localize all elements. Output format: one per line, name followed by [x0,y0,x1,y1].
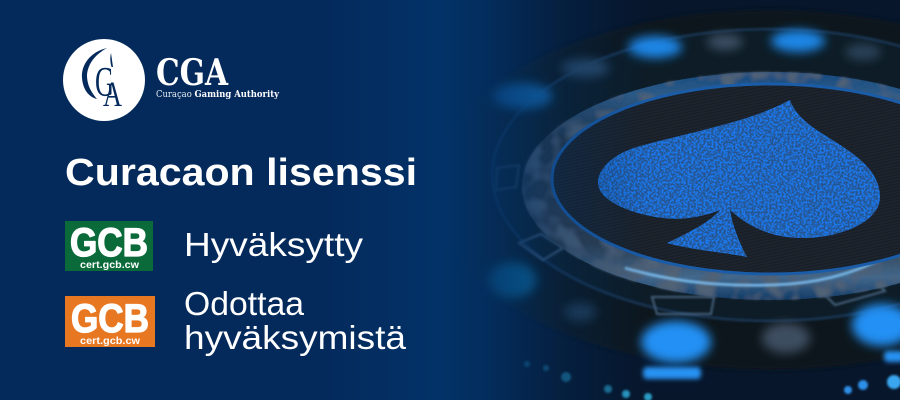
approved label: Hyväksytty [184,226,364,263]
green GCB badge: GCB [70,221,148,265]
title: Curacaon lisenssi [65,152,417,194]
lower sparkle lights [524,361,900,400]
green GCB badge: cert.gcb.cw [80,260,139,271]
chip centre face [552,84,900,274]
row: approved [65,221,364,271]
orange GCB badge: cert.gcb.cw [80,336,140,347]
square edge markers [496,165,885,314]
chip metallic ring [522,72,900,300]
pending label: Odottaa [184,285,305,322]
logo wordmark: CGA [156,52,229,94]
pending label [184,285,407,356]
outer chip body [542,10,900,370]
outer rim band [492,29,900,321]
spade [598,100,880,257]
bright bars near chip bottom [643,351,900,379]
blurred chip inlays [488,30,900,363]
logo tagline: Curaçao Gaming Authority [156,89,279,100]
orange GCB badge: GCB [71,297,149,341]
chip dark backdrop [440,0,900,400]
pending label: hyväksymistä [184,319,407,356]
logo circle monogram [63,39,145,121]
logo circle monogram: A [103,74,122,114]
row: pending [65,285,407,356]
ring glow bottom [624,263,878,288]
photo: poker chip with spade [430,0,900,400]
logo: CGA [63,39,279,121]
logo circle monogram: G [95,60,114,106]
